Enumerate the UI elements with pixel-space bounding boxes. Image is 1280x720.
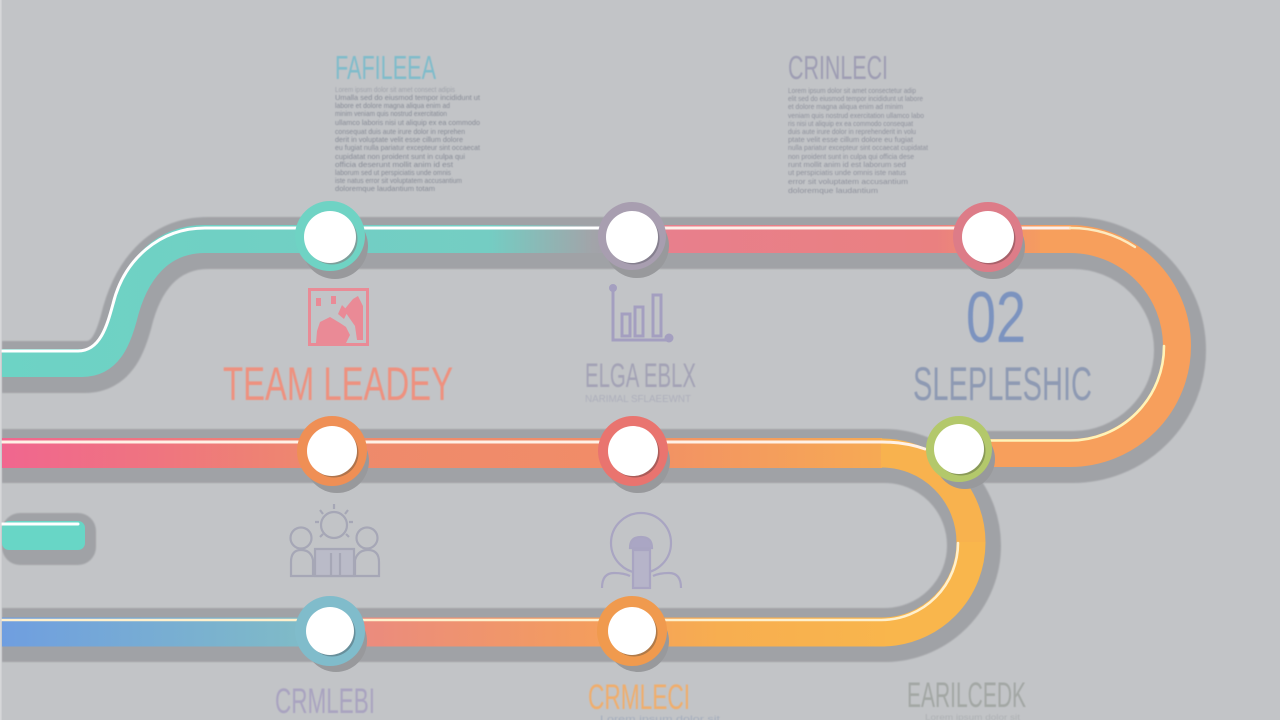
- top left text block: [335, 49, 481, 193]
- body text: top right: Lorem ipsum dolor sit amet consectetur adip: [788, 86, 916, 95]
- body text: top right: ut perspiciatis unde omnis iste natus: [788, 168, 906, 177]
- node: bottom left blue: [295, 596, 367, 672]
- icon: picture frame: [310, 290, 368, 344]
- label: bottom centre: CRMLECI: [588, 678, 690, 717]
- node: top left teal: [295, 201, 368, 279]
- track 1: teal to pink to orange: [2, 239, 1177, 453]
- label: team leadey: TEAM LEADEY: [223, 357, 453, 410]
- label: bottom left: CRMLEBI: [275, 682, 375, 720]
- body text: top left: cupidatat non proident sunt in culpa qui: [335, 152, 465, 161]
- body text: top right: non proident sunt in culpa qui officia dese: [788, 152, 914, 161]
- body text: top right: ris nisi ut aliquip ex ea commodo consequat: [788, 119, 914, 128]
- label: elga eblx: ELGA EBLX: [585, 357, 696, 395]
- body text: top left: labore et dolore magna aliqua enim ad: [335, 101, 450, 110]
- icon: bar chart: [610, 286, 672, 341]
- body text: top left: laborum sed ut perspiciatis unde omnis: [335, 168, 451, 177]
- label: bottom right: [907, 676, 1026, 720]
- node: bottom centre orange: [597, 596, 669, 672]
- left edge strip: [0, 0, 2, 720]
- body text: top right: error sit voluptatem accusantium: [788, 177, 908, 186]
- short teal pill: [2, 521, 85, 550]
- track shadows: [2, 243, 1180, 635]
- body text: top left: [335, 85, 481, 193]
- icon: team with sun: [290, 504, 379, 576]
- label: elga eblx: [585, 357, 696, 405]
- heading: top right: CRINLECI: [788, 49, 888, 86]
- body text: top left: Umalla sed do eiusmod tempor incididunt ut: [335, 93, 481, 102]
- body text: top right: doloremque laudantium: [788, 186, 878, 195]
- body text: top left: eu fugiat nulla pariatur excepteur sint occaecat: [335, 143, 481, 152]
- sublabel: NARIMAL SFLAEEWNT: [585, 394, 691, 405]
- number 02: 02: [966, 278, 1026, 358]
- body text: top left: consequat duis aute irure dolor in reprehen: [335, 127, 465, 136]
- track highlights: [2, 228, 1164, 620]
- heading: top left: FAFILEEA: [335, 49, 436, 86]
- body text: top right: nulla pariatur excepteur sint occaecat cupidatat: [788, 143, 929, 152]
- body text: top left: officia deserunt mollit anim id est: [335, 160, 454, 169]
- body text: top left: doloremque laudantium totam: [335, 184, 435, 193]
- node: middle centre coral: [598, 416, 670, 493]
- body text: top left: ullamco laboris nisi ut aliquip ex ea commodo: [335, 118, 480, 127]
- node: top middle purple: [598, 202, 669, 278]
- body text: top right: runt mollit anim id est laborum sed: [788, 160, 906, 169]
- body text: top right: ptate velit esse cillum dolore eu fugiat: [788, 135, 914, 144]
- track 2: pink to yellow, curves down: [2, 453, 971, 542]
- body text: top right: veniam quis nostrud exercitation ullamco labo: [788, 111, 924, 120]
- icon: figure in circle: [602, 513, 681, 588]
- body text: top right: duis aute irure dolor in reprehenderit in volu: [788, 127, 916, 136]
- node: middle left orange: [297, 416, 369, 493]
- label: slepleshic: SLEPLESHIC: [913, 357, 1092, 410]
- track 3: blue to yellow: [2, 542, 971, 632]
- body text: top left: derit in voluptate velit esse cillum dolore: [335, 135, 463, 144]
- body text: top right: elit sed do eiusmod tempor incididunt ut labore: [788, 94, 923, 103]
- label: bottom right: EARILCEDK: [907, 676, 1026, 715]
- node: junction green: [926, 416, 995, 489]
- node: top right pink: [953, 202, 1025, 279]
- body text: top left: iste natus error sit voluptatem accusantium: [335, 176, 462, 185]
- body text: top left: Lorem ipsum dolor sit amet consect adipis: [335, 85, 455, 94]
- body text: top left: minim veniam quis nostrud exercitation: [335, 109, 447, 118]
- top right text block: [788, 49, 929, 195]
- body text: top right: [788, 86, 929, 195]
- body text: top right: et dolore magna aliqua enim ad minim: [788, 102, 903, 111]
